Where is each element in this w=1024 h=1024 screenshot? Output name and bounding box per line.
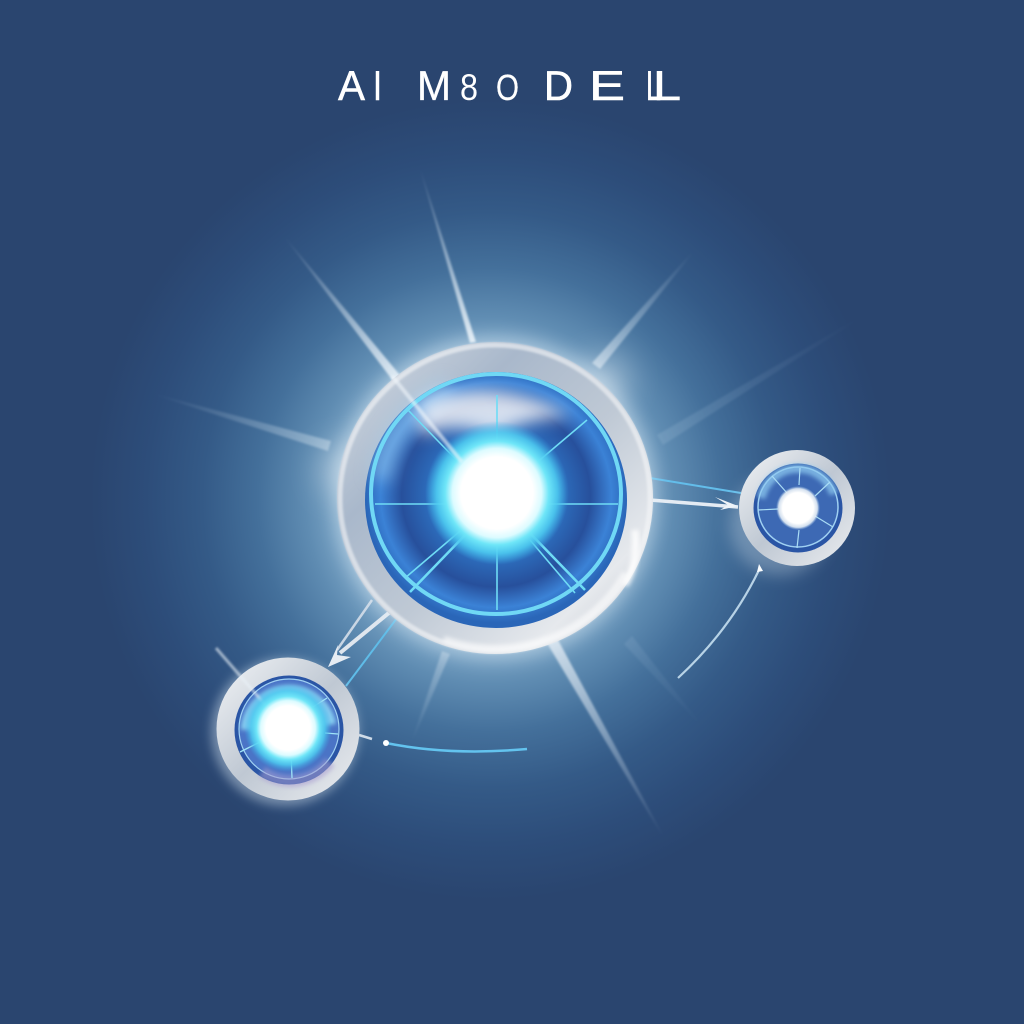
core bbox=[244, 684, 332, 772]
title: I bbox=[373, 62, 382, 109]
light rays bbox=[155, 170, 859, 836]
connector: arrows from large node to right node bbox=[650, 478, 741, 510]
outer glow bbox=[211, 658, 359, 806]
connector: arrows from large node to left node bbox=[328, 600, 397, 686]
glass highlight bbox=[420, 391, 572, 436]
metal rim bbox=[216, 658, 360, 800]
title: A bbox=[338, 62, 365, 109]
outer glow bbox=[333, 336, 657, 660]
blue disc bbox=[365, 372, 627, 628]
core bbox=[776, 486, 820, 530]
dark ring and disc bbox=[234, 676, 344, 784]
title: O bbox=[496, 67, 519, 108]
title bbox=[338, 62, 681, 109]
title: L bbox=[653, 62, 681, 109]
metal rim bbox=[739, 450, 855, 566]
right node bbox=[730, 450, 855, 575]
cyan ring bbox=[371, 374, 621, 614]
title: M bbox=[417, 62, 451, 109]
spokes bbox=[240, 698, 338, 778]
title: D bbox=[544, 62, 573, 109]
metal rim bbox=[337, 342, 653, 654]
title: 8 bbox=[460, 67, 478, 108]
spokes bbox=[375, 395, 618, 610]
dark ring and disc bbox=[754, 464, 842, 552]
ray over rim bbox=[392, 376, 462, 462]
glowing core bbox=[425, 421, 569, 565]
title: E bbox=[589, 62, 625, 109]
title: L bbox=[646, 62, 661, 109]
central node bbox=[319, 336, 657, 660]
connector: curved line from left node bbox=[359, 735, 527, 751]
left node bbox=[211, 648, 360, 806]
connector: curved arrow to right node bbox=[678, 564, 763, 678]
outer glow bbox=[730, 475, 830, 575]
left haze bbox=[380, 388, 450, 480]
spokes bbox=[758, 468, 833, 548]
